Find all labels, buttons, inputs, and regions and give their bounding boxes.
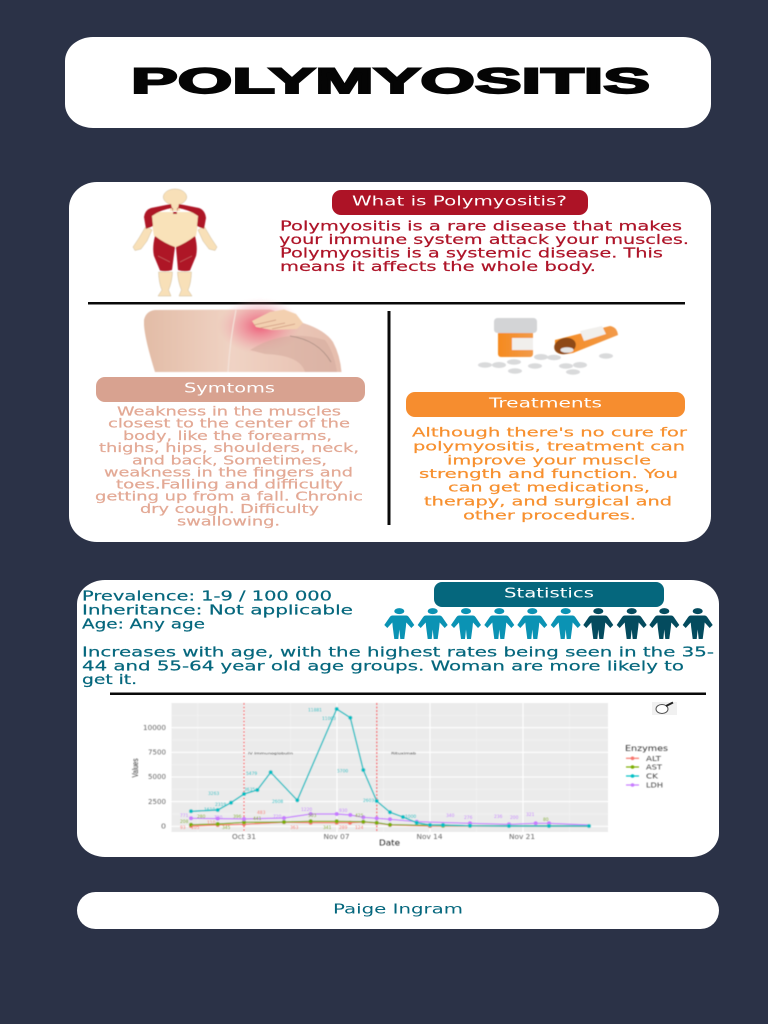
y axis labels: 10000 <box>143 724 166 732</box>
chart legend <box>625 744 668 790</box>
image: shoulder pain <box>144 298 342 372</box>
data labels: ALT and AST: 363 <box>290 825 299 831</box>
age and gender text: get it. <box>82 672 137 688</box>
chart legend: LDH <box>646 782 663 790</box>
title: POLYMYOSITIS <box>131 61 650 101</box>
line chart: enzyme values over time: 396 <box>233 814 242 820</box>
symptoms text: toes.Falling and difficulty <box>116 478 343 492</box>
data labels: LDH: 340 <box>446 813 455 819</box>
prevalence facts <box>82 589 353 633</box>
data labels: CK <box>204 708 416 820</box>
treatments text: other procedures. <box>463 507 636 522</box>
symptoms heading <box>96 377 365 402</box>
icon: pill bottles and pills <box>478 318 618 375</box>
data labels: LDH: 236 <box>494 814 503 820</box>
chart plot area <box>172 703 608 832</box>
data labels: CK: 3263 <box>208 791 219 797</box>
data labels: CK: 2603 <box>363 798 374 804</box>
definition text: Polymyositis is a rare disease that makes <box>280 219 682 234</box>
y axis labels <box>143 724 166 831</box>
chart legend: Enzymes <box>625 744 668 753</box>
symptoms text: closest to the center of the <box>108 417 350 431</box>
treatments text: therapy, and surgical and <box>424 494 672 509</box>
x axis labels: Nov 21 <box>509 833 535 841</box>
what is polymyositis heading: What is Polymyositis? <box>352 194 567 210</box>
definition text: means it affects the whole body. <box>280 260 596 275</box>
y axis labels: 7500 <box>148 749 166 757</box>
symptoms text: and back, Sometimes, <box>132 453 327 467</box>
series: LDH <box>191 814 589 825</box>
symptoms text: Weakness in the muscles <box>117 405 341 419</box>
x axis title: Date <box>379 838 400 848</box>
data labels: LDH: 200 <box>510 815 519 821</box>
treatments heading <box>406 392 685 417</box>
treatments text: can get medications, <box>448 480 650 495</box>
data labels: CK: 3635 <box>244 787 255 793</box>
data labels: ALT and AST: 483 <box>257 810 266 816</box>
symptoms heading: Symtoms <box>184 382 275 397</box>
what is polymyositis heading <box>332 190 588 215</box>
panel: overview, symptoms and treatments <box>69 182 711 542</box>
icon: body with affected muscles <box>133 189 217 296</box>
line chart: enzyme values over time: 208 <box>180 819 189 825</box>
line chart: enzyme values over time: 441 <box>253 816 262 822</box>
data labels: CK: 1610 <box>204 807 215 813</box>
prevalence facts: Inheritance: Not applicable <box>82 603 353 619</box>
data labels: CK: 5700 <box>337 768 348 774</box>
line chart: enzyme values over time: 503 <box>308 813 317 819</box>
y axis labels: 5000 <box>148 773 166 781</box>
data labels: LDH <box>180 807 535 821</box>
line chart: enzyme values over time <box>130 703 668 848</box>
definition text: your immune system attack your muscles. <box>279 233 689 248</box>
data labels: ALT and AST: 105 <box>191 825 200 831</box>
y axis labels: 0 <box>161 823 166 831</box>
data labels: LDH: 930 <box>339 808 348 814</box>
line chart: enzyme values over time: 280 <box>197 814 206 820</box>
series: CK <box>191 709 589 826</box>
data labels: ALT and AST <box>180 810 364 831</box>
y axis labels: 2500 <box>148 798 166 806</box>
x axis labels: Nov 14 <box>416 833 443 841</box>
treatments text: strength and function. You <box>419 466 678 481</box>
symptoms text: weakness in the fingers and <box>104 466 353 480</box>
data labels: LDH: 321 <box>526 812 535 818</box>
prevalence facts: Prevalence: 1-9 / 100 000 <box>82 589 332 605</box>
data labels: LDH: 720 <box>273 814 282 820</box>
data labels: ALT and AST: 124 <box>355 825 364 831</box>
chart legend: CK <box>646 772 659 780</box>
data labels: CK: 5479 <box>246 771 257 777</box>
symptoms text: body, like the forearms, <box>123 429 332 443</box>
line chart: enzyme values over time: 80 <box>543 817 549 823</box>
symptoms text: swallowing. <box>177 514 280 528</box>
treatment labels: IV Immunoglobulin <box>248 750 294 756</box>
series: ALT <box>191 822 589 826</box>
definition text <box>279 219 689 275</box>
footer panel: author <box>77 892 719 929</box>
definition text: Polymyositis is a systemic disease. This <box>280 247 663 262</box>
icon: row of ten people <box>384 608 713 639</box>
treatments text: Although there's no cure for <box>412 425 688 440</box>
line chart: enzyme values over time: 341 <box>323 825 332 831</box>
icon: magnifying glass <box>652 702 677 715</box>
line chart: enzyme values over time: 345 <box>222 825 231 831</box>
series: AST <box>191 821 589 826</box>
treatment date markers <box>244 703 377 832</box>
treatment labels: Rituximab <box>391 750 417 756</box>
age and gender text: Increases with age, with the highest rates being seen in the 35- <box>82 645 714 661</box>
line chart: enzyme values over time: 425 <box>355 813 364 819</box>
panel: statistics <box>77 580 719 857</box>
data labels: CK: 11003 <box>322 716 336 722</box>
symptoms text <box>95 405 363 528</box>
data labels: LDH: 276 <box>464 815 473 821</box>
treatments text: improve your muscle <box>447 452 651 467</box>
treatments text: polymyositis, treatment can <box>413 439 685 454</box>
data labels: LDH: 771 <box>180 813 189 819</box>
treatment labels <box>248 750 417 756</box>
chart legend: AST <box>646 764 663 772</box>
statistics heading: Statistics <box>504 586 594 601</box>
symptoms text: getting up from a fall. Chronic <box>95 490 363 504</box>
x axis labels: Nov 07 <box>324 833 350 841</box>
data labels: ALT and AST: 110 <box>207 820 216 826</box>
y axis title: Values <box>130 758 140 778</box>
data labels: CK: 1000 <box>405 814 416 820</box>
age and gender text: 44 and 55-64 year old age groups. Woman are more likely to <box>82 658 684 674</box>
footer panel: author: Paige Ingram <box>333 902 463 918</box>
treatments heading: Treatments <box>487 396 602 412</box>
age and gender text <box>82 645 714 688</box>
prevalence facts: Age: Any age <box>82 617 205 633</box>
data labels: CK: 11881 <box>308 708 322 714</box>
data labels: ALT and AST: 93 <box>180 825 186 831</box>
symptoms text: dry cough. Difficulty <box>140 502 319 516</box>
data labels: CK: 2608 <box>272 799 283 805</box>
x axis labels: Oct 31 <box>232 833 256 841</box>
statistics heading <box>434 582 664 607</box>
symptoms text: thighs, hips, shoulders, neck, <box>99 441 359 455</box>
data labels: ALT and AST: 289 <box>339 825 348 831</box>
chart legend: ALT <box>646 755 662 763</box>
x axis labels <box>232 833 535 841</box>
treatments text <box>412 425 688 522</box>
data labels: CK: 2319 <box>215 802 226 808</box>
data labels: LDH: 720 <box>214 815 223 821</box>
data labels: LDH: 1220 <box>301 807 312 813</box>
title panel <box>65 37 711 128</box>
